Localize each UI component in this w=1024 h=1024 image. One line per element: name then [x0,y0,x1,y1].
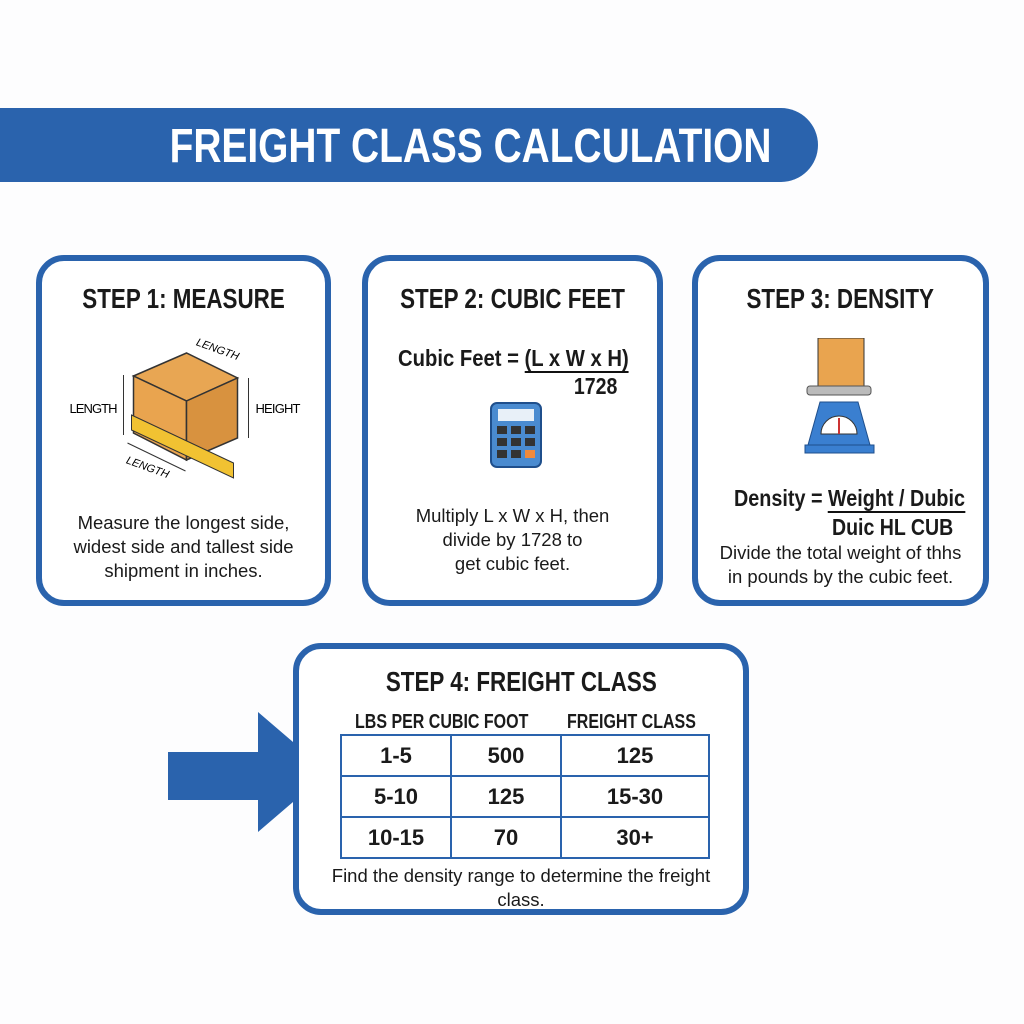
formula: density: Duic HL CUB [832,514,953,540]
text: step 4 description: class. [497,889,545,910]
table headers [355,711,696,733]
title: FREIGHT CLASS CALCULATION [170,120,772,173]
text: step 3 description [720,542,961,587]
table: freight class [340,734,710,859]
heading: step 2: STEP 2: CUBIC FEET [400,283,625,314]
table headers: FREIGHT CLASS [567,711,696,733]
text: step 3 description: Divide the total weight of thhs [720,542,961,563]
icon: box with tape measure: HEIGHT [256,401,301,416]
heading: step 4: STEP 4: FREIGHT CLASS [386,666,656,697]
text: step 1 description [73,512,294,581]
table: freight class: 125 [617,742,653,768]
formula: cubic feet: 1728 [574,373,617,399]
text: step 2 description [416,505,609,574]
icon: calculator [490,402,542,468]
formula: cubic feet [398,345,629,399]
table: freight class: 1-5 [380,742,412,768]
heading: step 3: STEP 3: DENSITY [747,283,934,314]
icon: box with tape measure: LENGTH [70,401,118,416]
formula: density [734,485,966,540]
text: step 1 description: shipment in inches. [104,560,263,581]
text: step 3 description: in pounds by the cubic feet. [728,566,953,587]
arrow [168,712,293,832]
text: step 1 description: Measure the longest side, [78,512,289,533]
table: freight class: 10-15 [368,824,424,850]
text: step 2 description: divide by 1728 to [443,529,582,550]
text: step 4 description: Find the density range to determine the freight [332,865,710,886]
table: freight class: 500 [488,742,524,768]
heading: step 1: STEP 1: MEASURE [82,283,285,314]
icon: box with tape measure: LENGTH [124,455,171,481]
table headers: LBS PER CUBIC FOOT [355,711,528,733]
table: freight class: 30+ [616,824,654,850]
table: freight class: 70 [494,824,518,850]
table: freight class: 15-30 [607,784,663,808]
icon: scale with box [804,338,874,454]
panel: step 2 [362,255,663,606]
panel: step 1 [36,255,331,606]
table: freight class: 125 [488,784,524,808]
table: freight class: 5-10 [374,784,418,808]
text: step 4 description [332,865,710,910]
title banner [0,108,818,182]
formula: density: Density = Weight / Dubic [734,485,965,511]
text: step 1 description: widest side and tallest side [73,536,294,557]
formula: cubic feet: Cubic Feet = (L x W x H) [398,345,629,371]
icon: box with tape measure: LENGTH [194,337,241,363]
text: step 2 description: Multiply L x W x H, then [416,505,609,526]
icon: box with tape measure [70,337,301,481]
panel: step 4 [293,643,749,915]
panel: step 3 [692,255,989,606]
text: step 2 description: get cubic feet. [455,553,570,574]
